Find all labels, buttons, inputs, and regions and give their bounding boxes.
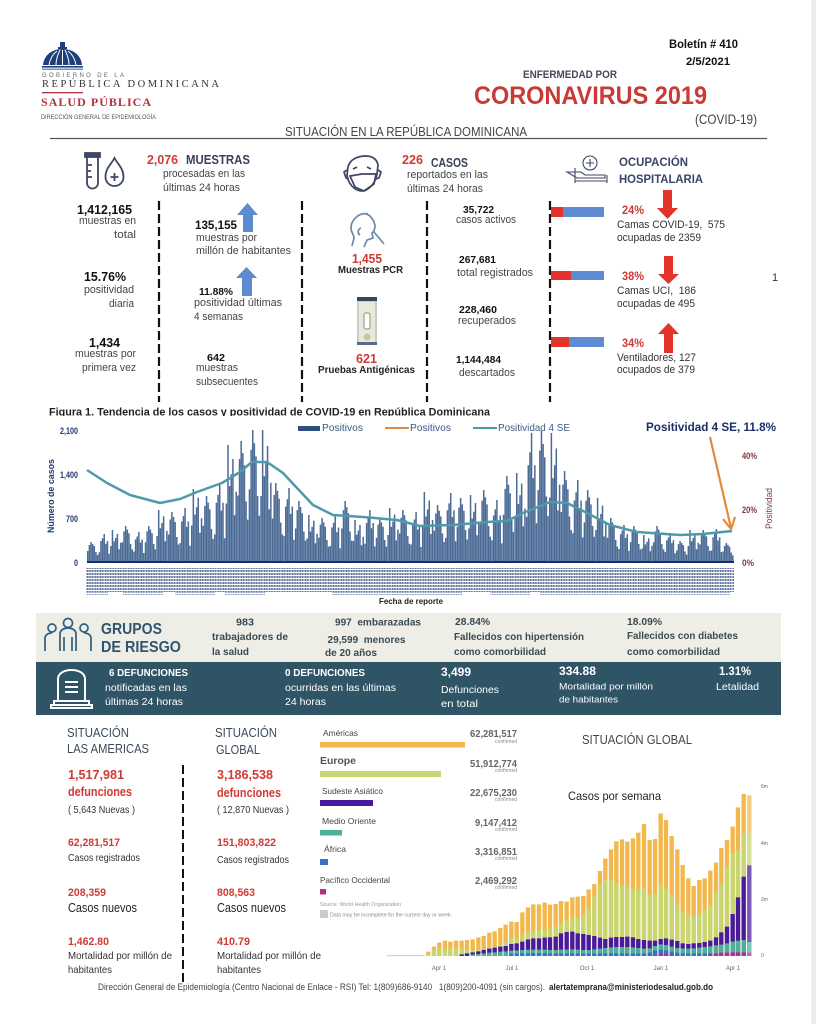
bar: camas UCI 38% (551, 271, 604, 280)
panel: casos: 35,722 (463, 204, 494, 216)
panel: defunciones: Mortalidad por millón (559, 682, 653, 692)
arrow: camas COVID down (657, 190, 678, 219)
left axis labels: 700 (66, 514, 78, 524)
panel: situación Las Américas: SITUACIÓN (67, 725, 129, 740)
panel: situación Las Américas: 1,462.80 (68, 936, 109, 948)
panel: situación Las Américas: defunciones (68, 785, 132, 799)
title: CORONAVIRUS 2019 (474, 82, 707, 110)
panel: defunciones: ocurridas en las últimas (285, 682, 396, 694)
panel: casos (402, 152, 533, 379)
panel: situación global: 151,803,822 (217, 837, 276, 849)
footer contact line: Dirección General de Epidemiología (Centro Nacional de Enlace - RSI) Tel: 1(809)686-9140 1(809)200-4091 (sin cargos). (98, 982, 545, 992)
chart: casos confirmados por región: Pacífico Occidental (320, 875, 390, 885)
chart: casos confirmados por región (320, 728, 517, 918)
panel: defunciones (36, 662, 781, 715)
panel: muestras: MUESTRAS (186, 152, 250, 167)
icon: antigen test cassette (357, 297, 377, 345)
x axis labels: Apr 1 (432, 966, 447, 972)
panel: muestras: muestras por (196, 232, 257, 244)
chart: casos confirmados por región: Europe (320, 756, 356, 767)
chart: casos confirmados por región: 2,469,292 (475, 875, 517, 887)
panel: situación global: SITUACIÓN (215, 725, 277, 740)
panel: pruebas PCR y antigénicas: 621 (356, 351, 377, 366)
panel: muestras: muestras por (75, 348, 136, 360)
panel: situación Las Américas: 1,517,981 (68, 767, 124, 782)
panel: grupos de riesgo: 28.84% (455, 616, 491, 628)
figure title: Figura 1. Tendencia de los casos y positividad de COVID-19 en República Dominicana (49, 406, 491, 418)
panel: muestras: últimas 24 horas (163, 182, 240, 194)
panel: muestras: millón de habitantes (196, 245, 291, 257)
panel: casos: últimas 24 horas (407, 183, 483, 195)
panel: situación Las Américas (67, 725, 172, 976)
arrow: camas UCI down (658, 256, 679, 284)
panel: ocupación hospitalaria: OCUPACIÓN (619, 154, 688, 169)
chart: casos confirmados por región: 3,316,851 (475, 846, 517, 858)
layer: África (511, 950, 749, 956)
panel: muestras: positividad últimas (194, 297, 282, 309)
panel: pruebas PCR y antigénicas: Pruebas Antigénicas (318, 364, 415, 376)
panel: muestras: 11.88% (199, 286, 234, 298)
bulletin number and date: 2/5/2021 (686, 56, 730, 68)
x axis labels: Oct 1 (580, 966, 595, 972)
icon: capitol dome (42, 42, 83, 70)
chart: casos confirmados por región: 9,147,412 (475, 817, 517, 829)
chart: casos confirmados por región: confirmed (495, 797, 517, 803)
panel: ocupación hospitalaria: 34% (622, 336, 644, 350)
panel: situación Las Américas: Casos nuevos (68, 901, 137, 915)
arrow: muestras por millón up (237, 203, 258, 232)
header logo: Gobierno de la República Dominicana: SALUD PÚBLICA (41, 95, 151, 109)
panel: casos: reportados en las (407, 169, 488, 181)
chart: tendencia de casos y positividad (46, 420, 776, 606)
panel: situación Las Américas: 62,281,517 (68, 837, 120, 849)
legend: Positividad 4 SE (498, 422, 570, 434)
panel: casos: CASOS (431, 155, 468, 170)
left axis labels: 2,100 (60, 426, 78, 436)
panel: pruebas PCR y antigénicas (318, 156, 415, 376)
layer: Sudeste Asiático (462, 865, 749, 956)
panel: ocupación hospitalaria: HOSPITALARIA (619, 172, 703, 186)
panel: ocupación hospitalaria: ocupadas de 495 (617, 298, 695, 310)
bar: camas COVID 24% (551, 207, 604, 217)
panel: situación global: Casos registrados (217, 855, 289, 866)
chart: casos confirmados por región: confirmed (495, 856, 517, 862)
panel: situación global (215, 725, 321, 976)
bulletin number and date: Boletín # 410 (669, 37, 738, 51)
chart: casos confirmados por región: Data may be incomplete for the current day or week. (330, 912, 452, 918)
panel: defunciones: Defunciones (441, 684, 499, 696)
panel: ocupación hospitalaria: 24% (622, 203, 644, 217)
chart: casos confirmados por región: Source: World Health Organization (320, 902, 401, 908)
panel: casos: 226 (402, 152, 423, 167)
panel: muestras: 15.76% (84, 270, 126, 284)
panel: defunciones: 334.88 (559, 666, 597, 678)
panel: situación global: 410.79 (217, 936, 250, 948)
panel: defunciones: 24 horas (285, 696, 326, 708)
positivity line (87, 462, 732, 535)
left axis labels: 0 (74, 558, 78, 568)
x axis labels: Jan 1 (654, 966, 669, 972)
panel: situación Las Américas: 208,359 (68, 887, 106, 899)
panel: defunciones: 0 DEFUNCIONES (285, 667, 365, 679)
panel: situación global: GLOBAL (216, 742, 260, 757)
icon: tombstone (51, 670, 92, 708)
legend: Positivos (322, 422, 363, 434)
panel: ocupación hospitalaria (551, 154, 725, 376)
title: (COVID-19) (695, 112, 757, 127)
y axis labels: 0 (761, 953, 764, 959)
arrow: positividad up (236, 267, 257, 296)
panel: muestras: muestras (196, 362, 238, 374)
layer: Américas (428, 794, 749, 956)
panel: defunciones: notificadas en las (105, 682, 187, 694)
header logo: Gobierno de la República Dominicana: REPÚBLICA DOMINICANA (42, 78, 219, 90)
panel: grupos de riesgo: como comorbilidad (454, 646, 546, 658)
panel: casos: 267,681 (459, 254, 496, 266)
header logo: Gobierno de la República Dominicana: DIRECCIÓN GENERAL DE EPIDEMIOLOGÍA (41, 114, 156, 121)
panel: muestras: 1,434 (89, 336, 120, 350)
bar: ventiladores 34% (551, 337, 604, 347)
y axis labels (761, 784, 768, 959)
panel: ocupación hospitalaria: 38% (622, 269, 644, 283)
panel: casos: total registrados (457, 267, 533, 279)
panel: muestras: 1,412,165 (77, 203, 132, 217)
panel: casos: descartados (459, 367, 515, 379)
right axis labels (742, 451, 774, 568)
icon: hospital bed (567, 156, 607, 183)
x axis title: Fecha de reporte (379, 596, 443, 606)
panel: ocupación hospitalaria: Camas COVID-19, 575 (617, 219, 725, 231)
chart: casos confirmados por región: confirmed (495, 827, 517, 833)
callout: positividad 4 SE: Positividad 4 SE, 11.8% (646, 420, 776, 434)
panel: grupos de riesgo: GRUPOS (101, 621, 162, 638)
axis baseline (87, 561, 734, 563)
panel: casos: 228,460 (459, 304, 497, 316)
layer: Medio Oriente (473, 940, 749, 956)
x axis labels: Apr 1 (726, 966, 741, 972)
panel: grupos de riesgo: 29,599 menores (328, 634, 406, 646)
right axis labels: 0% (742, 558, 754, 568)
arrow: ventiladores up (658, 323, 679, 353)
chart: casos confirmados por región: confirmed (495, 739, 517, 745)
chart: casos confirmados por región: 22,675,230 (470, 787, 517, 799)
panel: situación global: ( 12,870 Nuevas ) (217, 804, 289, 816)
panel: grupos de riesgo: Fallecidos con diabetes (627, 630, 738, 642)
panel: muestras: 2,076 (147, 152, 178, 167)
icon: nasal swab (351, 214, 384, 247)
layer: Europe (428, 833, 749, 956)
panel: situación Las Américas: Mortalidad por millón de (68, 950, 172, 962)
footer contact line: alertatemprana@ministeriodesalud.gob.do (549, 982, 713, 992)
right axis labels: 40% (742, 451, 757, 461)
chart: casos confirmados por región: Medio Oriente (322, 816, 376, 826)
panel: defunciones: 6 DEFUNCIONES (109, 667, 188, 679)
panel: grupos de riesgo: la salud (212, 646, 249, 658)
left axis labels (46, 426, 78, 568)
section heading: situación en la República Dominicana: SITUACIÓN EN LA REPÚBLICA DOMINICANA (285, 124, 527, 139)
panel: situación global: 3,186,538 (217, 767, 273, 782)
panel: grupos de riesgo: DE RIESGO (101, 639, 181, 656)
panel: casos: casos activos (456, 214, 516, 226)
dashed column dividers (159, 201, 550, 402)
panel: muestras: total (114, 229, 136, 241)
header logo: Gobierno de la República Dominicana: GOBIERNO DE LA (42, 73, 124, 79)
panel: ocupación hospitalaria: ocupados de 379 (617, 364, 695, 376)
arrow: orange callout pointer (710, 437, 735, 529)
panel: grupos de riesgo: de 20 años (325, 647, 377, 659)
stacked weekly bars (387, 794, 751, 956)
daily positive bars (87, 430, 734, 562)
panel: pruebas PCR y antigénicas: Muestras PCR (338, 264, 403, 276)
icon: test tube and drop (85, 153, 124, 188)
panel: muestras: 642 (207, 352, 225, 364)
title: ENFERMEDAD POR (523, 69, 617, 81)
panel: grupos de riesgo: Fallecidos con hipertensión (454, 631, 584, 643)
panel: grupos de riesgo: 997 embarazadas (335, 616, 421, 628)
date tick labels (86, 568, 734, 595)
panel: casos: recuperados (458, 315, 516, 327)
y axis labels: 4m (761, 841, 768, 847)
panel: grupos de riesgo: 983 (236, 616, 254, 628)
left axis labels: Número de casos (46, 459, 57, 533)
y axis labels: 6m (761, 784, 768, 790)
panel: muestras: subsecuentes (196, 376, 258, 388)
panel: grupos de riesgo: 18.09% (627, 616, 663, 628)
panel: ocupación hospitalaria: Camas UCI, 186 (617, 285, 696, 297)
x axis labels (432, 966, 741, 972)
panel: muestras: procesadas en las (163, 168, 245, 180)
panel: muestras (75, 152, 291, 388)
panel: muestras: primera vez (82, 362, 136, 374)
panel: situación global: habitantes (217, 964, 261, 976)
chart: casos confirmados por región: Sudeste Asiático (322, 786, 383, 796)
chart: casos confirmados por región: confirmed (495, 885, 517, 891)
panel: situación Las Américas: Casos registrados (68, 853, 140, 864)
x axis labels: Jul 1 (506, 966, 519, 972)
panel: situación global: Mortalidad por millón de (217, 950, 321, 962)
panel: defunciones: últimas 24 horas (105, 696, 183, 708)
panel: muestras: 4 semanas (194, 311, 243, 323)
left axis labels: 1,400 (60, 470, 78, 480)
panel: situación global: 808,563 (217, 887, 255, 899)
panel: muestras: 135,155 (195, 220, 238, 232)
title (474, 69, 757, 127)
panel: muestras: muestras en (79, 215, 136, 227)
y axis labels: 2m (761, 897, 768, 903)
panel: defunciones: de habitantes (559, 694, 618, 706)
chart: casos confirmados por región: Américas (323, 728, 358, 738)
layer: Pacífico Occidental (655, 952, 749, 956)
panel: situación Las Américas: LAS AMERICAS (67, 741, 149, 756)
panel: situación global: defunciones (217, 786, 281, 800)
panel: defunciones: 3,499 (441, 667, 471, 679)
panel: situación global: Casos nuevos (217, 901, 286, 915)
chart: casos confirmados por región: confirmed (495, 768, 517, 774)
panel: situación Las Américas: habitantes (68, 964, 112, 976)
panel: defunciones: 1.31% (719, 666, 751, 678)
panel: pruebas PCR y antigénicas: 1,455 (352, 251, 382, 266)
chart: casos por semana: Casos por semana (568, 789, 661, 803)
panel: ocupación hospitalaria: Ventiladores, 127 (617, 352, 696, 364)
chart: casos por semana (387, 784, 768, 972)
panel: grupos de riesgo: trabajadores de (212, 631, 288, 643)
panel: muestras: diaria (109, 298, 135, 310)
icon: group of people (45, 618, 91, 651)
panel: situación Las Américas: ( 5,643 Nuevas ) (68, 804, 135, 816)
panel: defunciones: en total (441, 698, 478, 710)
header logo: Gobierno de la República Dominicana (41, 42, 219, 121)
panel: muestras: positividad (84, 284, 134, 296)
panel: defunciones: Letalidad (716, 681, 759, 693)
panel: ocupación hospitalaria: ocupadas de 2359 (617, 232, 701, 244)
panel: grupos de riesgo (36, 613, 781, 662)
legend: Positivos (410, 422, 451, 434)
right axis labels: 20% (742, 505, 757, 515)
icon: face with mask (344, 156, 381, 191)
panel: grupos de riesgo: como comorbilidad (627, 646, 720, 658)
page number: 1 (772, 272, 778, 284)
chart: casos confirmados por región: 51,912,774 (470, 758, 517, 770)
heading: situación global chart: SITUACIÓN GLOBAL (582, 732, 692, 747)
panel: casos: 1,144,484 (456, 354, 501, 366)
bulletin number and date (669, 37, 738, 68)
chart: casos confirmados por región: África (324, 844, 346, 854)
chart: casos confirmados por región: 62,281,517 (470, 728, 517, 740)
right axis labels: Positividad (764, 488, 774, 529)
legend (298, 422, 570, 434)
